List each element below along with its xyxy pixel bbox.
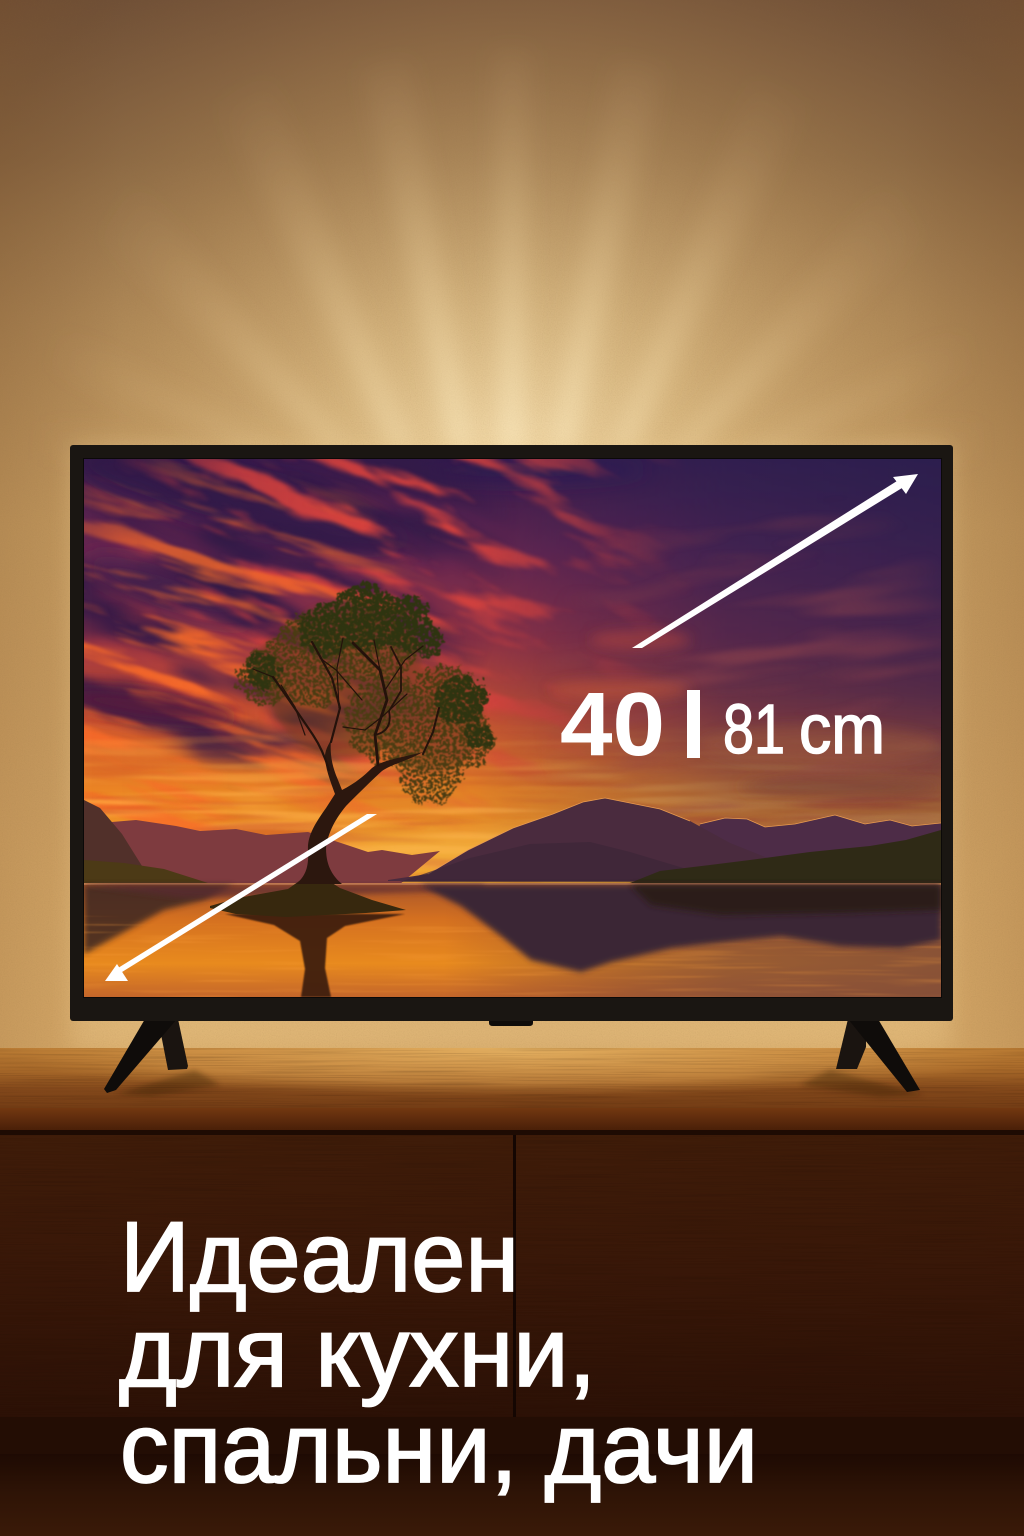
far mountains right [700,816,941,858]
forest shoreline right [630,830,941,883]
size label [560,675,885,775]
plinth [0,1417,1024,1454]
far mountains left [112,820,440,884]
headline [119,1201,758,1503]
lake [84,885,941,997]
headline: для кухни, [119,1296,596,1407]
tree canopy: translucent under-layer [254,602,482,772]
water ripples [84,915,941,997]
dark haze to the right [243,459,941,883]
light rays behind the TV [0,50,1024,460]
sky [84,459,941,883]
diagonal centimetres: 81 [723,690,785,768]
right drawer [516,1135,1024,1417]
mountain reflection [420,885,941,972]
diagonal arrow: upper right [632,474,918,648]
headline: Идеален [120,1201,519,1312]
left shore reflection [84,885,234,954]
left drawer [0,1135,513,1417]
cabinet top surface [0,1048,1024,1108]
left hill [84,800,208,883]
TV frame [70,445,953,1026]
tree canopy: dense crown [244,583,492,749]
diagonal inches: 40 [560,675,665,775]
cabinet [0,1048,1024,1536]
central mountain [388,798,795,881]
floor [0,1454,1024,1536]
headline: спальни, дачи [120,1392,758,1503]
cabinet front edge [0,1108,1024,1130]
diagonal arrow: lower left [105,814,377,981]
tree trunk [296,740,423,884]
shadows of stand on cabinet [116,1070,925,1097]
island [210,879,406,917]
tree canopy: foliage [237,596,495,804]
TV screen: sunset landscape [84,459,941,997]
tree [237,583,495,884]
TV logo tab [489,1021,533,1026]
wall background with warm backlight [0,0,1024,1050]
separator bar [687,690,700,758]
unit: cm [799,690,885,768]
TV stand: left foot [104,1019,188,1093]
tree branches [253,638,439,770]
TV stand: right foot [836,1019,920,1092]
horizon line [84,883,941,885]
tree reflection [225,914,405,997]
